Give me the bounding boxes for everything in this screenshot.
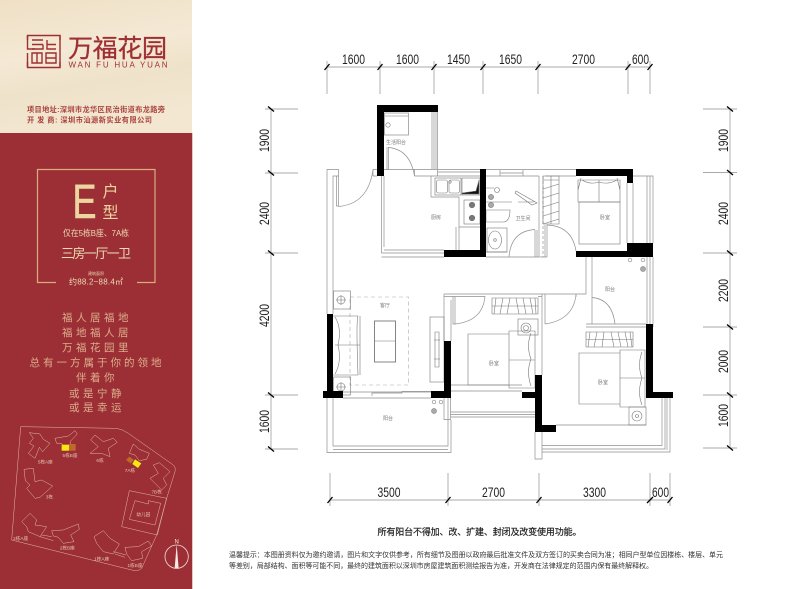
top dimension chain: 1600 — [396, 51, 419, 67]
disclaimer line 1: 温馨提示：本图册资料仅为邀约邀请，图片和文字仅供参考，所有细节及图册以政府最后批准文件及双方签订的买卖合同为准；相同户型单位因楼栋、楼层、单元 — [229, 550, 723, 559]
bottom dimension chain: 2700 — [482, 484, 505, 500]
project address: 项目地址:深圳市龙华区民治街道布龙路旁 — [27, 105, 165, 114]
map labels: 5栋A座 — [38, 458, 53, 465]
top dimension chain: 1650 — [499, 51, 522, 67]
room labels: 卧室 — [600, 214, 610, 221]
right dimension chain: 2000 — [715, 350, 731, 373]
panel: sidebar header background — [0, 0, 192, 133]
wardrobes — [492, 176, 633, 347]
side table upper — [334, 291, 350, 309]
central balcony — [576, 257, 592, 324]
building note: 仅在5栋B座、7A栋 — [63, 228, 129, 238]
gas stove — [464, 200, 480, 224]
bedroom 1 walls — [627, 183, 633, 243]
top dimension chain: 600 — [632, 51, 649, 67]
map labels — [13, 452, 162, 569]
bottom dimension chain: 3500 — [378, 484, 401, 500]
room labels: 卧室 — [598, 379, 608, 386]
poem text — [30, 311, 164, 414]
kindergarten plot — [122, 491, 167, 535]
kitchen counter — [431, 176, 480, 250]
room labels: 阳台 — [605, 286, 615, 293]
entry and left wall — [327, 170, 338, 314]
panel: sidebar red background — [0, 133, 192, 589]
bed bedroom 2 — [468, 334, 509, 385]
room labels: 卫生间 — [515, 215, 531, 222]
drains — [432, 400, 436, 404]
side table lower — [334, 377, 350, 395]
unit label: 户 — [102, 183, 119, 201]
area label: 建筑面积 — [88, 270, 104, 276]
map labels: 3栋 — [46, 494, 53, 501]
map labels: 6栋 — [96, 457, 104, 464]
kitchen walls — [382, 176, 444, 257]
disclaimer — [229, 550, 723, 570]
room labels: 卧室 — [489, 360, 499, 367]
bedroom 2 walls — [444, 294, 485, 341]
top dimension chain — [324, 51, 652, 94]
top dimension chain: 1450 — [447, 51, 470, 67]
room labels: 客厅 — [380, 302, 390, 309]
living balcony — [327, 398, 451, 452]
left dimension chain: 1900 — [256, 129, 272, 152]
right dimension chain: 2400 — [715, 202, 731, 225]
bed bedroom 1 — [579, 202, 620, 244]
left dimension chain: 1600 — [256, 410, 272, 433]
bed bedroom 3 — [579, 353, 620, 404]
room labels: 厨房 — [431, 214, 441, 221]
TV cabinet — [430, 317, 444, 382]
poem text: 福人居福地 — [62, 311, 132, 324]
living to balcony sliders — [343, 392, 431, 398]
bottom dimension chain — [328, 473, 672, 506]
project info — [27, 105, 165, 124]
right dimension chain: 2200 — [715, 279, 731, 302]
unit label: 型 — [102, 204, 119, 222]
site boundary — [12, 427, 175, 571]
poem text: 总有一方属于你的领地 — [30, 356, 164, 369]
logo: Wan Fu Hua Yuan — [28, 35, 168, 70]
bathroom top window — [486, 170, 576, 176]
icon: north compass: N — [174, 539, 179, 545]
unit label — [102, 183, 119, 222]
poem text: 伴着你 — [76, 371, 118, 384]
right dimension chain — [703, 106, 737, 450]
kitchen fixtures — [384, 113, 480, 224]
sidebar edge — [192, 133, 193, 589]
top dimension chain: 2700 — [572, 51, 595, 67]
site map — [12, 427, 188, 571]
frame outline — [38, 170, 155, 282]
room labels: 生活阳台 — [386, 139, 406, 146]
left dimension chain: 4200 — [256, 304, 272, 327]
black structural walls — [323, 105, 673, 432]
bathroom fixtures — [486, 188, 537, 252]
poem text: 万福花园里 — [62, 341, 132, 354]
carpet — [350, 297, 408, 385]
right dimension chain: 1900 — [715, 129, 731, 152]
logo wordmark: 万福花园 — [68, 35, 167, 63]
thin wall lines — [327, 112, 670, 459]
map labels: 2栋B座 — [60, 545, 75, 552]
balcony notice: 所有阳台不得加、改、扩建、封闭及改变使用功能。 — [378, 526, 582, 537]
developer: 开 发 商: 深圳市汕源新实业有限公司 — [27, 116, 152, 124]
wardrobe bedroom 1 — [543, 176, 559, 224]
icon: seal symbol — [28, 36, 60, 68]
right dimension chain: 1600 — [715, 404, 731, 427]
wardrobe bedroom 3 — [586, 332, 633, 347]
highlighted units — [62, 444, 141, 468]
area value: 约88.2~88.4㎡ — [69, 276, 123, 286]
room labels: 阳台 — [383, 415, 393, 422]
map labels: 2栋A座 — [13, 535, 29, 542]
furniture: living room — [333, 291, 444, 395]
map labels: 1栋A座 — [94, 555, 110, 562]
map labels: 7A栋 — [125, 467, 136, 474]
shower and bath — [486, 191, 537, 205]
bedroom 2 balcony strip — [451, 412, 535, 417]
room layout: 三房一厅一卫 — [61, 246, 131, 261]
left dimension chain: 2400 — [256, 202, 272, 225]
fridge — [462, 178, 480, 195]
kitchen sink — [435, 178, 461, 195]
coffee table — [374, 321, 396, 362]
poem text: 或是幸运 — [69, 402, 125, 414]
nightstand bedroom 3 — [629, 407, 646, 425]
room labels — [380, 139, 615, 422]
disclaimer line 2: 等差别，局部结构、面积等可能不同，最终的建筑面积以深圳市房屋建筑面积测绘报告为准，开发商在法律规定的范围内保有最终解释权。 — [229, 561, 653, 570]
bathroom side walls — [539, 176, 547, 257]
service balcony — [432, 112, 438, 169]
furniture: beds — [468, 178, 646, 425]
building outlines — [22, 431, 170, 561]
logo pinyin: WAN FU HUA YUAN — [68, 60, 168, 70]
wash basin — [487, 228, 507, 252]
panel: unit type frame — [38, 170, 155, 286]
left dimension chain — [256, 106, 298, 452]
map labels: 5栋B座 — [62, 452, 78, 459]
unit letter: E — [72, 176, 96, 229]
bottom dimension chain: 3300 — [583, 484, 606, 500]
bedroom 3 lower walls — [535, 425, 646, 459]
map labels: 幼儿园 — [136, 511, 151, 518]
poem text: 福地福人居 — [62, 326, 132, 339]
map labels: 7B栋 — [151, 488, 162, 495]
floor plan — [323, 105, 673, 459]
wardrobe bedroom 2 — [492, 298, 538, 314]
nightstand bedroom 2 — [518, 319, 538, 335]
bottom dimension chain: 600 — [652, 484, 669, 500]
sofa — [333, 316, 360, 375]
map labels: 1栋B座 — [127, 562, 143, 569]
poem text: 或是宁静 — [69, 387, 125, 400]
icon: north compass — [165, 539, 188, 568]
top dimension chain: 1600 — [342, 51, 365, 67]
washing machine — [384, 113, 408, 135]
